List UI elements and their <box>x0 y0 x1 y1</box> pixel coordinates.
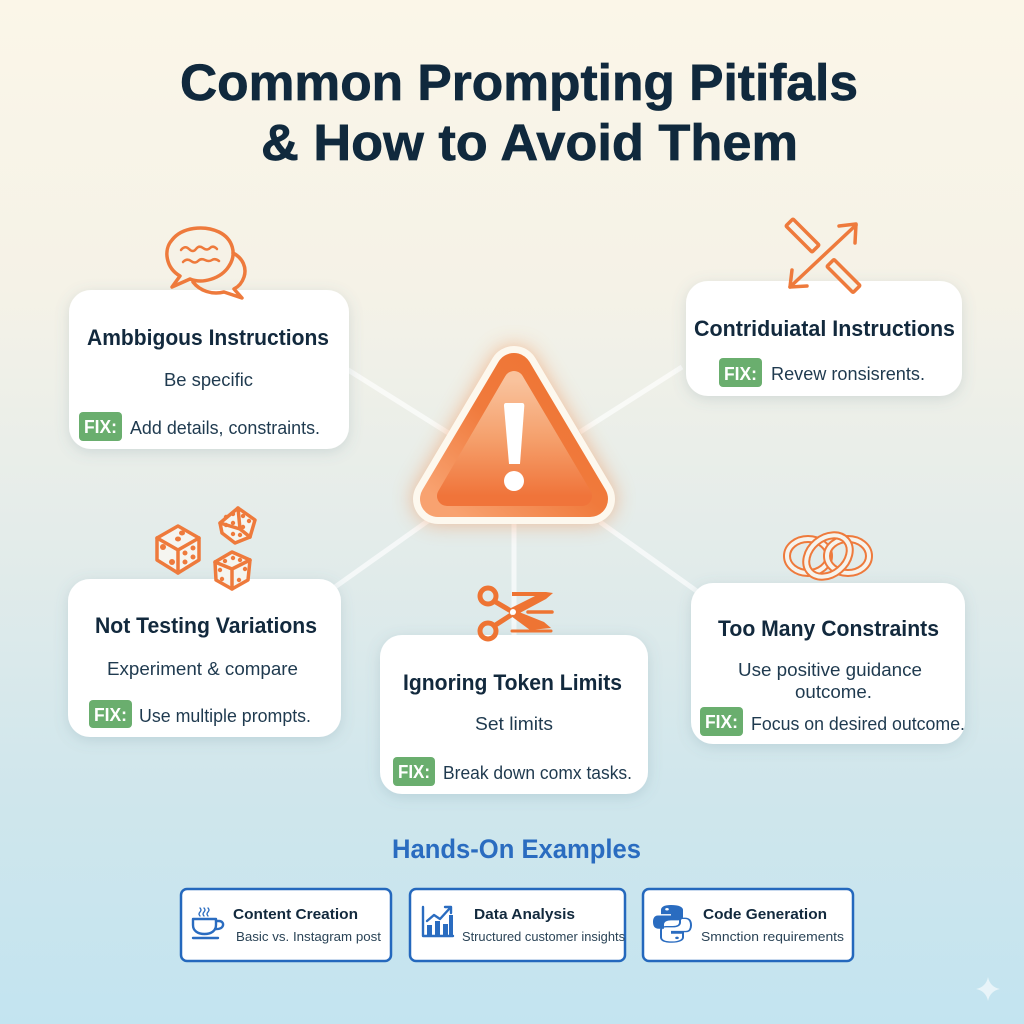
section heading: hands-on examples: Hands-On Examples <box>392 834 641 864</box>
fix badge: FIX: <box>724 364 757 384</box>
fix text: Focus on desired outcome. <box>751 714 965 734</box>
icon: python logo <box>653 905 691 942</box>
fix text: Add details, constraints. <box>130 418 320 438</box>
icon: scissors <box>480 588 553 639</box>
title: Common Prompting Pitifals <box>180 54 858 111</box>
connector lines <box>335 367 698 640</box>
panel: ignoring token limits <box>380 635 648 794</box>
heading: Ambbigous Instructions <box>87 325 329 350</box>
fix badge <box>79 412 122 441</box>
description: Basic vs. Instagram post <box>236 929 381 944</box>
fix text: Revew ronsisrents. <box>771 364 925 384</box>
panel: ambiguous instructions <box>69 290 349 449</box>
title <box>180 54 858 171</box>
subtitle: Experiment & compare <box>107 659 298 679</box>
heading: Not Testing Variations <box>95 613 317 638</box>
fix badge <box>719 358 762 387</box>
subtitle: Be specific <box>164 370 253 390</box>
example card: data analysis <box>410 889 625 961</box>
die one <box>157 526 199 573</box>
panel: contradictory instructions <box>686 281 962 396</box>
icon: conflicting arrows <box>786 219 860 293</box>
die two <box>220 508 255 543</box>
example card: code generation <box>643 889 853 961</box>
heading: Ignoring Token Limits <box>403 670 622 695</box>
icon: coffee cup <box>193 908 223 938</box>
subtitle: outcome. <box>795 682 872 702</box>
fix badge: FIX: <box>705 712 738 732</box>
fix badge: FIX: <box>84 417 117 437</box>
icon: dice <box>157 508 255 589</box>
heading: Contriduiatal Instructions <box>694 316 955 341</box>
icon: speech bubbles <box>167 228 245 298</box>
fix badge: FIX: <box>94 705 127 725</box>
icon: bar chart <box>423 907 453 936</box>
description: Structured customer insights <box>462 929 625 944</box>
fix text: Break down comx tasks. <box>443 763 632 783</box>
panel: not testing variations <box>68 579 341 737</box>
central warning icon <box>438 371 590 499</box>
subtitle: Set limits <box>475 714 553 734</box>
label: Data Analysis <box>474 906 575 923</box>
die three <box>215 552 250 589</box>
fix badge <box>89 700 132 728</box>
fix text: Use multiple prompts. <box>139 706 311 726</box>
panel: too many constraints <box>691 583 965 744</box>
label: Code Generation <box>703 906 827 923</box>
heading: Too Many Constraints <box>718 616 939 641</box>
label: Content Creation <box>233 906 358 923</box>
fix badge <box>700 707 743 736</box>
fix badge <box>393 757 435 786</box>
icon: sparkle <box>976 977 1000 1001</box>
description: Smnction requirements <box>701 929 845 944</box>
fix badge: FIX: <box>398 762 430 782</box>
title: & How to Avoid Them <box>261 114 798 171</box>
subtitle <box>738 660 922 702</box>
subtitle: Use positive guidance <box>738 660 922 680</box>
icon: interlocked rings <box>787 527 869 585</box>
example card: content creation <box>181 889 391 961</box>
